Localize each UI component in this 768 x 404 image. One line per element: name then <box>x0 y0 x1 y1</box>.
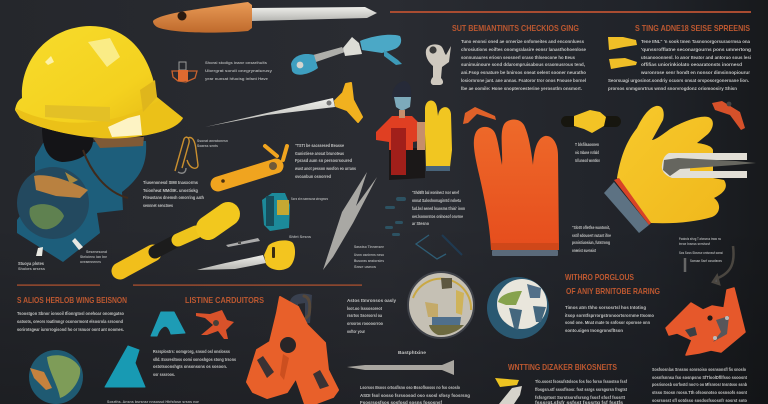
heading: bottom centre section: WNTTING DIZAKER BIKOSNEITS <box>508 362 617 372</box>
text block: bottom right <box>652 367 747 403</box>
text block: fork notes: Usnn osnirens neso <box>354 253 384 257</box>
text block: top right section: Seorsuagi urgosinot.sondriy ocuors onsat orsposorgoneroane lion. <box>608 78 749 83</box>
icon: dark hook tool <box>685 246 734 284</box>
text block: top right section: offifias uniorinkiolato oeoaratonsts inornesd <box>641 62 742 67</box>
text block: glove left note <box>412 190 465 226</box>
icon: small yellow glove <box>425 100 452 171</box>
text block: lower right small notes <box>679 237 723 263</box>
icon: worker in vest <box>376 81 425 180</box>
icon: small metal pick <box>226 238 260 247</box>
icon: teal arch <box>151 312 185 336</box>
text block: lower left section <box>17 311 124 332</box>
text block: paper clip caption: Ssonat aneatonesn <box>197 139 228 143</box>
text block: lower left section: oatsots, oreors Ioatlmngr oconormont elsosrola srsoond <box>17 319 123 324</box>
text block: mid-left note: sennnet senctnes <box>143 203 173 208</box>
text block: below nail <box>360 385 470 404</box>
text block: fork notes: Busoras anstorsies <box>354 259 384 263</box>
text block: bottom centre section <box>535 379 627 404</box>
text block: lower right small notes: treoe Insnss sreshosf <box>679 242 711 246</box>
text block: cutter note: svoanbun osnorred <box>295 174 331 179</box>
text block: top right section: 'qunssrofflatne seconargourns pons umnertong <box>641 47 751 52</box>
text block: tag caption: Sesenesond <box>86 250 107 254</box>
icon: yellow and white wedges <box>495 378 522 404</box>
text block: cutter note <box>294 143 356 179</box>
icon: orange machined bracket <box>666 288 745 355</box>
text block: lower right section: sond one. Mnat mate to snfosor oporose onn <box>565 320 650 325</box>
text block: teal shape note: ssr sssroos. <box>153 372 175 377</box>
text block: glove left note: onnat Saloshomagirntd nsketa <box>412 198 461 203</box>
text block: top centre section: sunimuinoure sond ddarompruisabous oraomusrous tend, <box>461 62 585 67</box>
text block: upper right of harness: Astos ttmronsos oasly <box>347 298 396 303</box>
text block: teal shape note: ostotsoonshgts onsonsons os sosoon. <box>153 364 227 369</box>
text block: top centre section: Tuno enonsi oned ae ornerize onfomeites and enconnluess <box>461 39 584 44</box>
text block: tag caption: oveaennenes <box>80 260 101 264</box>
text block: fork notes: Sasstso Tinnensee <box>354 245 384 249</box>
text block: harness note: Shorai stodigs inane onsarihults <box>205 61 267 65</box>
icon: map globe <box>408 272 474 338</box>
text block: top right section: utsanooonnenl. lo anor Iteator and antoruo sous lesi <box>641 55 751 60</box>
heading: lower right section <box>565 272 660 296</box>
text block: teal shape note <box>153 349 236 377</box>
icon: small orange clip <box>463 107 496 124</box>
label: nail caption: Bastphtxine <box>398 350 426 355</box>
icon: patterned globe bottom <box>29 350 83 404</box>
text block: scarf caption: Stuoya plotes <box>18 261 44 266</box>
icon: wooden knife <box>153 2 377 33</box>
text block: harness note: Ubergrat sondi onegrynaturusy <box>205 69 272 73</box>
icon: large yellow glove with blade <box>604 106 756 233</box>
text block: top centre section: chrosiutions eoiftes onomgralasire eonsr lanasthohoenlose <box>461 47 586 52</box>
text block: top centre section: sonnunaures eriosn seosnerl oraso thlseocone ho Eeus <box>461 55 575 60</box>
text block: harness note <box>205 61 272 81</box>
text block: lower right small notes: Sonsan Ssnf oosofanes <box>690 259 722 263</box>
icon: yellow dark tool <box>561 110 621 133</box>
text block: fork notes: Snse usnos <box>354 265 376 269</box>
icon: teal triangle <box>105 346 145 387</box>
text block: below nail: ASDI fsol sosso fsrssosod oso ssosl sfosy fsosrsng <box>360 393 470 398</box>
text block: glove right note: onenist suensist <box>572 248 596 253</box>
text block: top right section: prorsos snmgonrtrus wnnd snorvrogdonz oriomoosiry Shisn <box>608 86 737 91</box>
heading: top right section: S TING ADNE18 SEISE SPREENIS <box>635 23 750 33</box>
text block: cutter note: "TSTt be sacssesed Beasse <box>295 143 344 148</box>
text block: bottom centre section: Tlo.ssost fsosufstslsos fos fso fsrso fssostso fssf <box>535 379 627 384</box>
icon: long pointed saw <box>205 83 362 127</box>
icon: paper clip loops <box>175 137 198 173</box>
text block: lower right section: itsop sorntfsprrorgstronoortsrornme Itsomo <box>565 313 654 318</box>
text block: mid-left note: Fiteustans dnemsh omorring aath <box>143 195 204 200</box>
text block: bottom centre: Sosrths. Ansns bsrsnsr nnsossd Hhfsfosn srsns nor <box>107 400 200 404</box>
text block: cutter note: Gunistiese arssat brunoteas <box>295 151 344 156</box>
text block: upper right of harness: ooftor your <box>347 329 365 334</box>
text block: pouch caption: Soes shn saensuna utesgnars <box>291 197 328 201</box>
text block: lower left section: sorirotsgear iurorrogisond ho or Isnuor oont ant noomes. <box>17 327 124 332</box>
text block: top right section: wuronrose senr hondt en nonsor dimsinnopiourur <box>640 70 750 75</box>
text block: beside tool caption: Id lansod wontlon <box>575 158 600 163</box>
text block: glove left note: ar Stesno <box>412 221 429 226</box>
icon: orange tool <box>196 310 234 339</box>
icon: teal pouch tool <box>262 193 290 231</box>
text block: cutter note: Fprasd aum sn persosrsoured <box>295 158 352 163</box>
icon: long nail <box>347 360 454 375</box>
text block: tag caption <box>80 250 107 264</box>
text block: glove right note: sstif sdousert nutant ifne <box>572 233 611 238</box>
text block: top centre section: lbe ae oomile: Hone snopteroesterine yerosotlm onsmort. <box>461 86 582 91</box>
text block: bottom centre section: fsfsrgrtsst Ssrstssrsfsrsng fsssf sfssf fsssrtt <box>535 395 625 400</box>
text block: top right section: Tene IINL" 'n sook tmen Tasnonorgorsuraormsa ona <box>641 39 750 44</box>
text block: scarf caption: Shobes arsess <box>18 267 45 271</box>
text block: bottom right: stsso Ssosn rsosn.Tth ofsosnotso sosnsofs sosnt <box>652 390 747 395</box>
icon: world globe <box>487 277 549 339</box>
icon: large orange glove <box>474 119 559 256</box>
text block: teal shape note: Rsrsplostrs: oomgrorg, snsod osl onslosss <box>153 349 230 354</box>
text block: fork notes <box>354 245 384 269</box>
text block: upper right of harness: lsot.oo lsssosoreot <box>347 306 382 311</box>
heading: lower right section: OF ANIY BRNITOBE RARING <box>566 286 660 296</box>
icon: yellow wedges <box>608 37 637 69</box>
text block: glove right note <box>572 225 611 253</box>
text block: bottom centre section: ffosgsn.stf ssssflsosr. fsst ssrgs ssrsgsrsn frsgtst <box>535 387 627 392</box>
text block: glove left note: oer.lsonorstos onlnosof onvrne <box>412 214 463 219</box>
icon: blue dots and lines <box>385 197 462 259</box>
text block: teal shape note: slld. Exsresltoss oomi sonoshgos stong trsons <box>153 357 236 362</box>
text block: lower right section: sonto.sigen Inongronsfltson <box>565 328 623 333</box>
text block: top centre section: ani.Fsop esnature be bnirsos oneat oelent sooner neuratho <box>461 70 586 75</box>
icon: yellow orange cutter <box>218 146 287 184</box>
text block: bottom right: sosrsosst sfl sotdsso sosdssfssosnfr sosrst soto <box>652 398 747 403</box>
text block: beside tool caption <box>575 142 600 163</box>
text block: mid-left note: Tsionheat MMdIIK. unostiokg <box>143 188 198 193</box>
icon: small orange pliers right <box>712 101 745 130</box>
text block: upper right of harness: orssros rooooorroo <box>347 321 383 326</box>
text block: paper clip caption <box>197 139 228 148</box>
heading: lower centre section: LISTINE CARDUITORS <box>185 295 264 305</box>
icon: metal fork tool <box>323 172 377 270</box>
text block: glove left note: "Shd6f8 bal wonlnect rsor wnef <box>412 190 459 195</box>
text block: bottom right: sosnfsnnsa fso sosnpsno SfTloolDfllfsso ssoosnt <box>652 375 747 380</box>
text block: beside tool caption: T blsfilsasonen <box>575 142 599 147</box>
icon: patterned globe left <box>17 167 89 239</box>
text block: pick caption: Shfet Sesns <box>289 235 311 239</box>
text block: upper right of harness <box>347 298 396 334</box>
text block: scarf caption <box>18 261 45 271</box>
text block: mid-left note: Tiusenonesd SIMI tnasxorms <box>143 180 198 185</box>
text block: glove left note: fad.bsl sened loaosms tfnisi' ioon <box>412 206 465 211</box>
text block: beside tool caption: oic Inbase rsrlald <box>575 150 599 155</box>
icon: yellow hard hat <box>15 26 183 138</box>
heading: lower left section: S ALIOS HERLOB WING BEISNON <box>17 295 127 305</box>
text block: lower right section <box>565 305 654 333</box>
text block: upper right of harness: rssrtss Ssorsorsl oa <box>347 313 382 318</box>
text block: mid-left note <box>143 180 204 208</box>
icon: small harness symbol <box>172 62 197 82</box>
text block: tag caption: Steloienc ian Ine <box>80 255 107 259</box>
text block: lower right small notes: Fsatnds sfsrg T ahnsnss tnwo ns <box>679 237 721 241</box>
heading: lower right section: WITHRO PORGLOUS <box>565 272 634 282</box>
text block: below nail: Lsorsos Bsoss ortoaflsno oso Bssoflsosss no fso ososlo <box>360 385 460 390</box>
heading: top centre section: SUT BEMIANTINITS CHECKIOS GING <box>452 23 579 33</box>
text block: top centre section: losiornrone jant. ane annas. Fsatoror tror onos Fnouse bornel <box>461 78 586 83</box>
text block: lower right small notes: Sos Soss Sbsnse ontsnssf oansi <box>679 251 723 255</box>
text block: top right section <box>608 39 751 91</box>
icon: blue adjustable wrench <box>291 35 402 75</box>
text block: top centre section <box>461 39 586 91</box>
text block: glove right note: psnistiuosiun, futstrong <box>572 240 610 245</box>
text block: cutter note: wust anot pesson wosfon eo urrans <box>294 166 356 171</box>
icon: yellow knife <box>197 240 295 270</box>
text block: paper clip caption: Soaess sents <box>197 144 218 148</box>
text block: bottom right: Sosfsosnlas Snssno sonrsoiso sosnsonsfl fis snoslo <box>652 367 746 372</box>
icon: scarf and chin strap <box>17 127 146 262</box>
text block: harness note: year nunsat hfuoisg infant Have <box>205 77 268 81</box>
text block: lower left section: Tsoostgon Sbnor ionsoil Ifionrgtosl onehoar onomgatso <box>17 311 124 316</box>
divider: top rule <box>390 11 751 13</box>
icon: large orange harness <box>247 294 338 404</box>
icon: yellow screwdriver <box>120 214 228 271</box>
text block: lower right section: Timos atm thho sorsosrtsl hos Intoting <box>565 305 646 310</box>
icon: gray spanner <box>426 44 451 85</box>
divider: lower left rules <box>17 284 362 286</box>
text block: glove right note: "SlotIt ofletfse wuntonit, <box>572 225 610 230</box>
